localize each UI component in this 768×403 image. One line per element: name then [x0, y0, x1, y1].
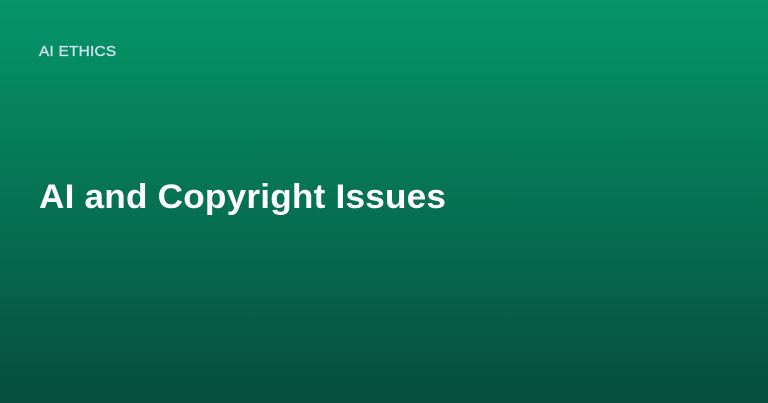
- title: AI and Copyright Issues: [39, 178, 446, 216]
- eyebrow: category label: AI ETHICS: [39, 43, 116, 60]
